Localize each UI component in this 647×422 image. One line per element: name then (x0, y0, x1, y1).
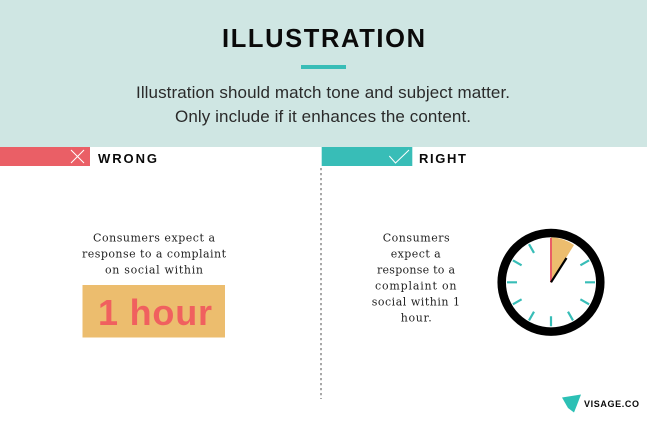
right example text: complaint on (375, 280, 456, 293)
clock ticks (507, 244, 595, 326)
icon: cross (71, 150, 84, 163)
wrong banner (0, 147, 157, 166)
black hand (551, 258, 566, 282)
subtitle: Illustration should match tone and subject matter. (136, 83, 510, 102)
wrong example text (82, 232, 227, 276)
right banner (322, 147, 466, 166)
red hand (550, 238, 552, 282)
right example text: response to a (377, 264, 455, 277)
clock wedge (551, 237, 574, 282)
wrong example highlight: 1 hour (82, 285, 225, 338)
wrong example text: response to a complaint (82, 248, 227, 260)
title underline (301, 65, 346, 69)
right label: RIGHT (419, 151, 466, 166)
title: ILLUSTRATION (222, 25, 425, 53)
divider (320, 168, 322, 399)
logo (562, 394, 639, 412)
logo mark (562, 394, 581, 412)
subtitle (136, 83, 510, 126)
right example text: Consumers (383, 232, 450, 245)
wrong example highlight: 1 hour: 1 hour (98, 292, 212, 333)
right example text: social within 1 (372, 296, 460, 309)
right example text: hour. (401, 312, 432, 325)
subtitle: Only include if it enhances the content. (175, 107, 471, 126)
icon: check (389, 150, 409, 163)
icon: clock (502, 233, 600, 332)
wrong label: WRONG (98, 151, 157, 166)
logo text: VISAGE.CO (584, 399, 639, 409)
wrong example text: Consumers expect a (93, 232, 215, 244)
clock rim (502, 233, 600, 332)
header panel (0, 0, 647, 147)
wrong example text: on social within (105, 264, 203, 276)
right example text (372, 232, 460, 325)
right example text: expect a (391, 248, 441, 261)
